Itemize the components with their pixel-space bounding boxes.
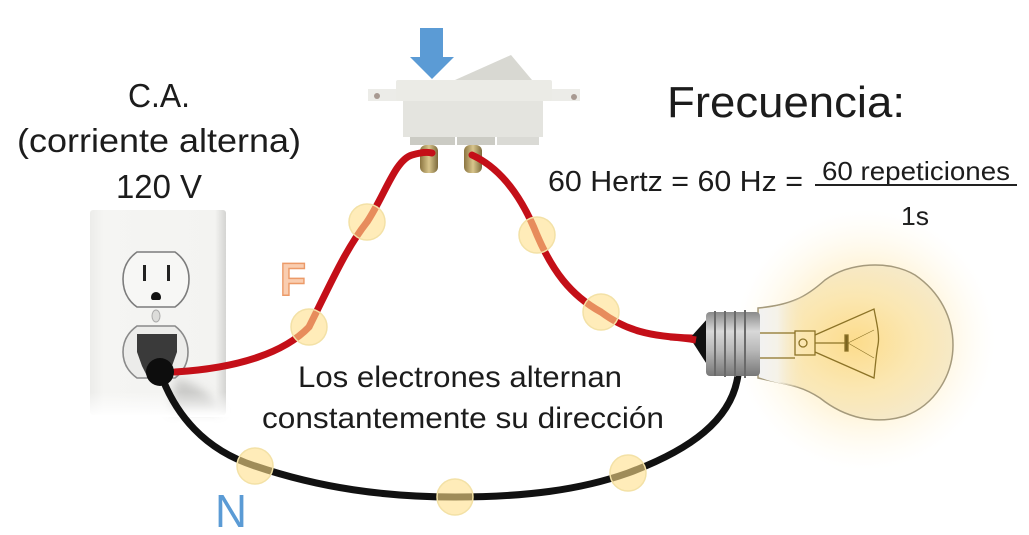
- caption: electrons alternate: [262, 361, 664, 435]
- formula: 60 Hertz: [548, 156, 1017, 231]
- label: F phase: F: [280, 253, 306, 305]
- heading: C.A. corriente alterna 120 V: (corriente alterna): [17, 122, 301, 159]
- wire: red phase right: [472, 155, 692, 338]
- formula: 60 Hertz: 1s: [901, 201, 929, 231]
- screw: [152, 310, 160, 322]
- wire: black neutral: [160, 372, 738, 497]
- glow: [735, 210, 995, 470]
- icon: blue down arrow: [410, 28, 454, 79]
- caption: electrons alternate: Los electrones alternan: [298, 361, 622, 394]
- lower socket with plug: [123, 326, 188, 378]
- heading: Frecuencia: Frecuencia:: [667, 78, 905, 127]
- icon: light bulb: [690, 210, 995, 470]
- icon: wall outlet: [86, 210, 230, 417]
- heading: C.A. corriente alterna 120 V: 120 V: [116, 168, 202, 205]
- red wire end at bulb: [670, 337, 696, 340]
- screw base: [690, 310, 760, 378]
- icon: plug head: [146, 358, 174, 386]
- wire: red phase left: [175, 152, 432, 372]
- electrons: yellow dots: [237, 204, 646, 515]
- heading: C.A. corriente alterna 120 V: C.A.: [128, 77, 190, 114]
- formula: 60 Hertz: 60 repeticiones: [822, 156, 1010, 186]
- formula: 60 Hertz: 60 Hertz = 60 Hz =: [548, 166, 803, 198]
- glass: [758, 265, 953, 420]
- upper socket: [123, 252, 189, 307]
- filament: [760, 309, 879, 378]
- heading: C.A. corriente alterna 120 V: [17, 77, 301, 205]
- icon: rocker switch: [368, 55, 580, 173]
- caption: electrons alternate: constantemente su dirección: [262, 402, 664, 435]
